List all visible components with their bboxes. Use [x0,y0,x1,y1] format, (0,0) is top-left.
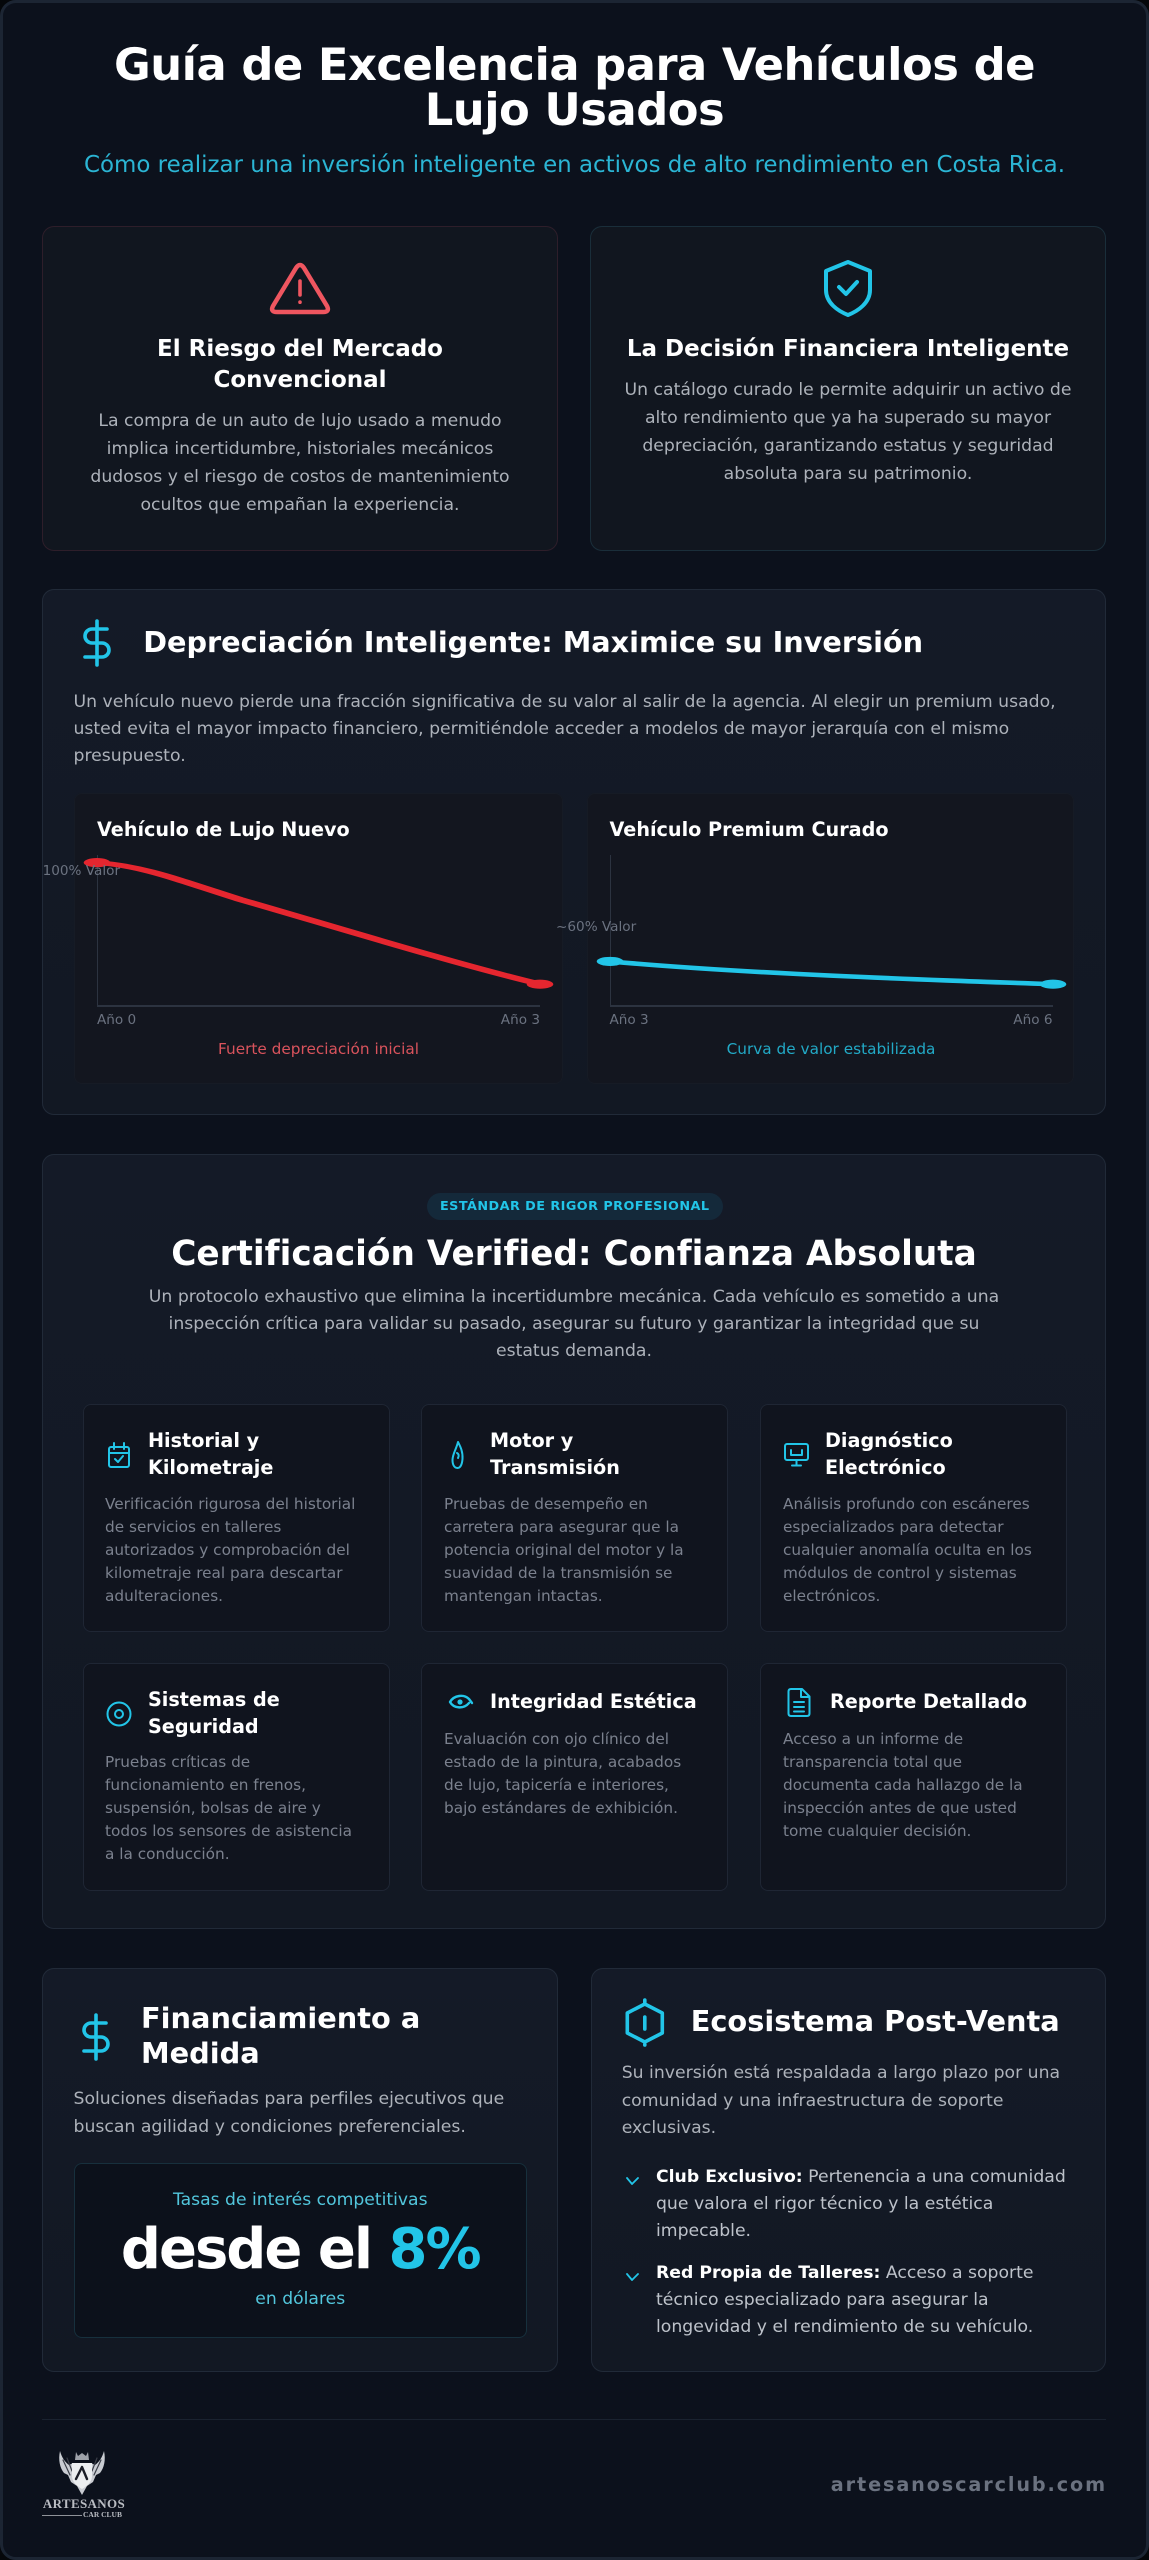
icon: check [626,2273,639,2281]
card: integridad estética [421,1663,728,1891]
heading: Convencional [213,366,387,392]
icon: eye [448,1694,474,1709]
card text: Pruebas de desempeño en [444,1494,648,1512]
card text: de servicios en talleres [105,1518,281,1536]
card text: Verificación rigurosa del historial [105,1494,355,1512]
card title: Historial y [148,1429,259,1452]
text: presupuesto. [74,746,186,766]
text: absoluta para su patrimonio. [724,464,972,484]
card text: Acceso a un informe de [783,1730,963,1748]
icon: warning triangle [270,262,330,314]
panel: decisión financiera [590,226,1106,551]
text: alto rendimiento que ya ha superado su mayor [645,408,1051,428]
card text: bajo estándares de exhibición. [444,1799,678,1817]
footer url: artesanoscarclub.com [831,2473,1107,2496]
callout value: desde el 8% [121,2217,480,2282]
card text [783,1494,1032,1605]
card text: especializados para detectar [783,1518,1004,1536]
heading: Ecosistema Post-Venta [691,2004,1060,2038]
text [149,1287,999,1361]
card: seguridad [83,1663,390,1891]
icon: dollar [82,2013,110,2061]
heading [157,336,443,392]
list item: club [626,2167,1066,2241]
card: historial [83,1404,390,1632]
item text: longevidad y el rendimiento de su vehículo. [656,2317,1033,2337]
card title: Kilometraje [148,1456,273,1479]
text: La compra de un auto de lujo usado a menudo [98,411,502,431]
text [74,692,1056,766]
chart title: Vehículo de Lujo Nuevo [97,818,350,841]
text: usted evita el mayor impacto financiero, permitiéndole acceder a modelos de mayor jerarquía con el mismo [74,719,1009,739]
card title [825,1429,953,1479]
card text [105,1494,355,1605]
icon: flame [452,1441,464,1469]
card title: Motor y [490,1429,573,1452]
card text: inspección antes de que usted [783,1799,1017,1817]
card text [444,1730,681,1817]
value label: 100% Valor [43,863,120,879]
item text: Club Exclusivo: Pertenencia a una comunidad [656,2167,1066,2187]
card text: cualquier anomalía oculta en los [783,1541,1032,1559]
icon: document [788,1688,810,1717]
icon: dollar [83,619,111,667]
text: Un protocolo exhaustivo que elimina la incertidumbre mecánica. Cada vehículo es sometido a una [149,1287,999,1307]
item text [656,2167,1066,2241]
text [622,2063,1060,2138]
card text: Evaluación con ojo clínico del [444,1730,669,1748]
text: Un catálogo curado le permite adquirir un activo de [625,380,1071,400]
card text [444,1494,684,1605]
card text: estado de la pintura, acabados [444,1753,681,1771]
logo wordmark: ARTESANOS [43,2496,125,2511]
text [74,2089,504,2137]
callout label: Tasas de interés competitivas [173,2190,428,2210]
text: implica incertidumbre, historiales mecánicos [107,439,493,459]
icon: target circle [106,1702,132,1726]
icon: crest [59,2451,105,2495]
title [114,38,1035,136]
heading: El Riesgo del Mercado [157,336,443,362]
card title: Integridad Estética [490,1690,697,1713]
card: diagnóstico [760,1404,1067,1632]
card text: suavidad de la transmisión se [444,1564,672,1582]
card text: módulos de control y sistemas [783,1564,1017,1582]
text: Un vehículo nuevo pierde una fracción significativa de su valor al salir de la agencia. Al elegir un premium usado, [74,692,1056,712]
card text: carretera para asegurar que la [444,1518,679,1536]
title: Lujo Usados [425,83,724,136]
icon: check [626,2177,639,2185]
callout: tasa [74,2163,527,2338]
line chart [610,855,1052,1007]
title: Guía de Excelencia para Vehículos de [114,38,1035,91]
chart title: Vehículo Premium Curado [610,818,889,841]
chart: vehículo de lujo nuevo [74,793,563,1084]
text: dudosos y el riesgo de costos de mantenimiento [90,467,510,487]
card text [783,1730,1023,1840]
card text: documenta cada hallazgo de la [783,1776,1023,1794]
logo [42,2451,125,2519]
subtitle: Cómo realizar una inversión inteligente en activos de alto rendimiento en Costa Rica. [84,152,1065,178]
card title [490,1429,620,1479]
card text: adulteraciones. [105,1587,223,1605]
icon: shield check [824,260,872,317]
text: exclusivas. [622,2118,716,2138]
logo subtitle: CAR CLUB [83,2510,122,2519]
panel: financiamiento a medida [42,1968,558,2372]
axis label start: Año 0 [97,1012,136,1028]
heading: Certificación Verified: Confianza Absoluta [171,1234,977,1274]
text: inspección crítica para validar su pasado, asegurar su futuro y garantizar la integridad que su [169,1314,979,1334]
card title [148,1688,280,1738]
card text: funcionamiento en frenos, [105,1776,306,1794]
heading [141,2001,420,2070]
panel: ecosistema post-venta [591,1968,1106,2372]
card text: todos los sensores de asistencia [105,1822,352,1840]
value label: ~60% Valor [556,918,636,934]
item text: técnico especializado para asegurar la [656,2290,989,2310]
heading: Financiamiento a [141,2001,420,2035]
panel: depreciación inteligente [42,589,1106,1115]
text: depreciación, garantizando estatus y seguridad [642,436,1054,456]
axis label end: Año 3 [501,1012,540,1028]
list item: talleres [626,2263,1034,2337]
callout note: en dólares [255,2289,345,2309]
heading: La Decisión Financiera Inteligente [627,336,1069,362]
chart: vehículo premium curado [586,793,1074,1084]
icon: calendar check [108,1442,130,1468]
text: estatus demanda. [496,1341,652,1361]
icon: hexagon [626,1998,664,2047]
badge: ESTÁNDAR DE RIGOR PROFESIONAL [440,1199,710,1214]
card text: autorizados y comprobación del [105,1541,350,1559]
card text: mantengan intactas. [444,1587,603,1605]
card title: Transmisión [490,1456,620,1479]
card text: potencia original del motor y la [444,1541,684,1559]
heading: Depreciación Inteligente: Maximice su Inversión [143,625,923,659]
card text: tome cualquier decisión. [783,1822,971,1840]
line chart [97,855,540,1007]
text: Soluciones diseñadas para perfiles ejecutivos que [74,2089,504,2109]
axis label end: Año 6 [1013,1012,1052,1028]
card text [105,1753,352,1863]
card title: Seguridad [148,1715,259,1738]
card text: suspensión, bolsas de aire y [105,1799,321,1817]
heading: Medida [141,2036,260,2070]
text: buscan agilidad y condiciones preferenciales. [74,2117,466,2137]
card title [148,1429,273,1479]
card: reporte detallado [760,1663,1067,1891]
card text: a la conducción. [105,1845,230,1863]
icon: monitor [784,1443,809,1466]
card text: Pruebas críticas de [105,1753,250,1771]
card title: Reporte Detallado [830,1690,1027,1713]
text [90,411,510,515]
card title: Electrónico [825,1456,946,1479]
card text: Análisis profundo con escáneres [783,1494,1030,1512]
text: ocultos que empañan la experiencia. [140,495,460,515]
text: Su inversión está respaldada a largo plazo por una [622,2063,1060,2083]
panel: riesgo del mercado [42,226,558,551]
axis label start: Año 3 [610,1012,649,1028]
card text: transparencia total que [783,1753,962,1771]
caption: Curva de valor estabilizada [727,1040,935,1058]
item text: impecable. [656,2221,751,2241]
caption: Fuerte depreciación inicial [218,1040,419,1058]
card text: kilometraje real para descartar [105,1564,342,1582]
card: motor [421,1404,728,1632]
card title: Sistemas de [148,1688,280,1711]
badge [426,1193,723,1220]
item text [656,2263,1034,2337]
item text: Red Propia de Talleres: Acceso a soporte [656,2263,1034,2283]
text: comunidad y una infraestructura de soporte [622,2091,1004,2111]
panel: certificación verified [42,1154,1106,1929]
card title: Diagnóstico [825,1429,953,1452]
text [625,380,1071,484]
item text: que valora el rigor técnico y la estética [656,2194,993,2214]
card text: electrónicos. [783,1587,880,1605]
card text: de lujo, tapicería e interiores, [444,1776,669,1794]
